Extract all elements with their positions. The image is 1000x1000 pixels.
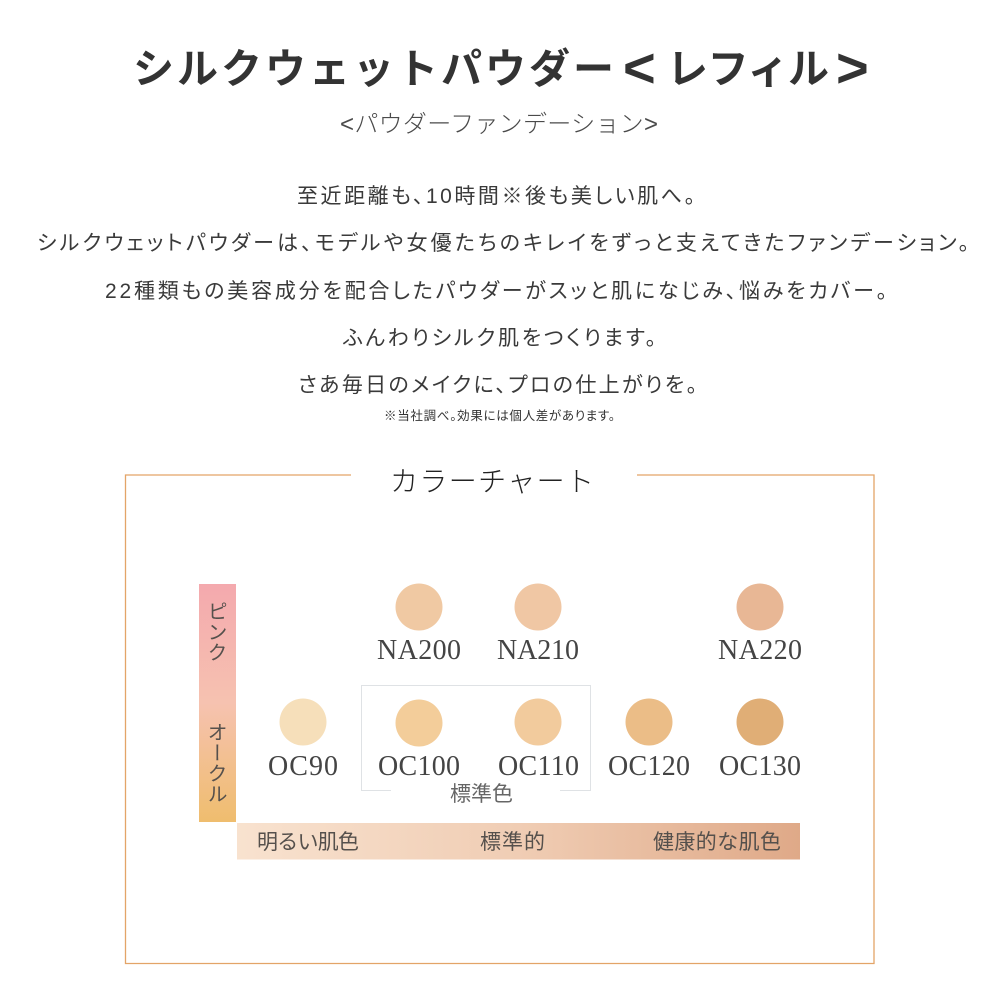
swatch: OC120: OC120 [608,751,690,782]
title [133,36,869,99]
panel: color chart [126,466,874,964]
swatch: OC130: OC130 [719,751,801,782]
axis bar: light to healthy skin: 健康的な肌色 [653,826,781,856]
footnote: ※当社調べ。効果には個人差があります。 [384,405,615,424]
swatch: OC100: OC100 [378,751,460,782]
swatch: OC110: OC110 [498,751,579,782]
title: < [623,36,656,99]
swatch: OC90: OC90 [268,751,338,782]
standard color bracket: 標準色 [450,783,513,806]
heading: color chart: カラーチャート [390,466,594,497]
swatch: OC110 [498,698,579,782]
text block: description: ふんわりシルク肌をつくります。 [342,327,656,350]
swatch: NA210: NA210 [497,635,579,666]
swatch: OC100 [378,700,460,782]
standard color bracket [362,686,590,806]
swatch: NA220 [718,584,802,666]
swatch: NA200: NA200 [377,635,461,666]
swatch: OC130 [719,698,801,782]
text block: description: シルクウェットパウダーは、モデルや女優たちのキレイをずっと支えてきたファンデーション。 [37,232,969,255]
title: レフィル [667,46,829,92]
text block: description: 22種類もの美容成分を配合したパウダーがスッと肌になじみ、悩みをカバー。 [105,280,887,303]
text block: description: さあ毎日のメイクに、プロの仕上がりを。 [298,374,697,397]
title: > [836,36,869,99]
text block: description: 至近距離も、10時間※後も美しい肌へ。 [297,185,695,208]
axis bar: light to healthy skin: 標準的 [480,826,545,856]
panel frame [126,475,874,964]
swatch: OC120 [608,698,690,782]
swatch: NA210 [497,584,579,666]
swatch: NA200 [377,584,461,666]
axis bar: pink to ochre: ピンク [204,601,226,662]
swatch: NA220: NA220 [718,635,802,666]
axis bar: light to healthy skin [237,823,800,860]
title: シルクウェットパウダー [133,46,614,92]
axis bar: pink to ochre [199,584,236,822]
swatch: OC90 [268,698,338,782]
axis bar: light to healthy skin: 明るい肌色 [257,826,359,856]
subtitle: <パウダーファンデーション> [340,111,658,138]
axis bar: pink to ochre: オークル [204,722,226,804]
text block: description [37,185,969,397]
